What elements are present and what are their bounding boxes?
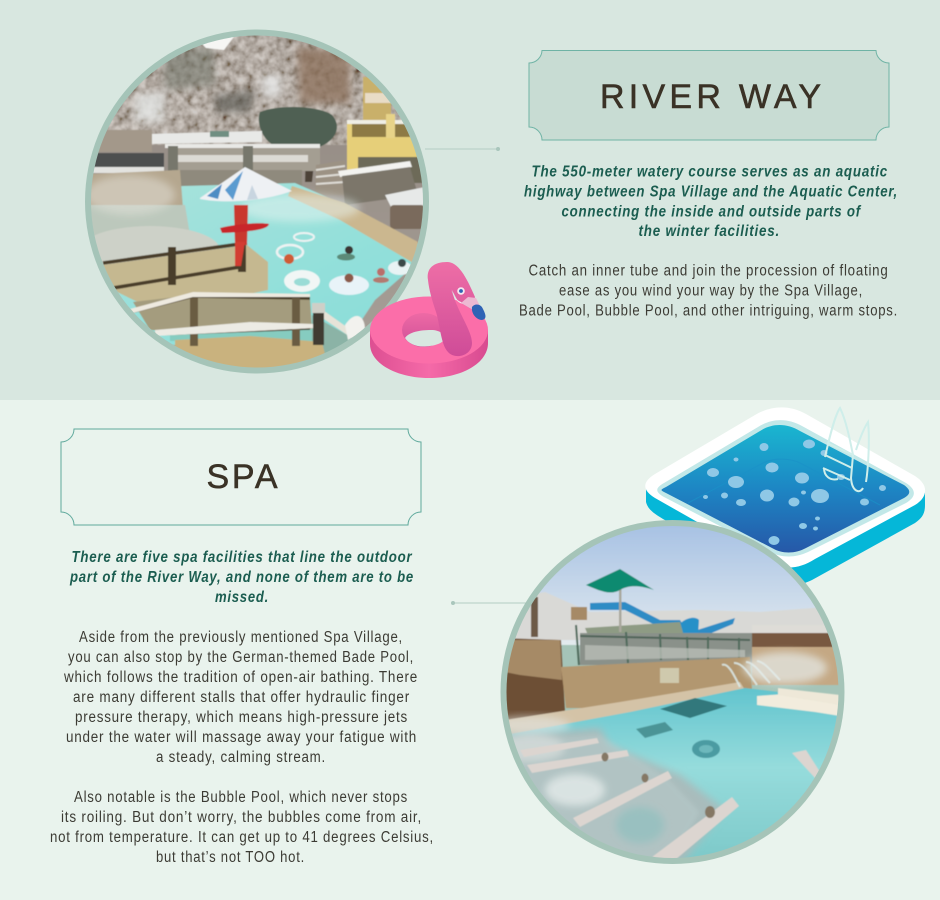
pool water [500, 688, 845, 865]
text block: spa body first paragraph: Aside from the previously mentioned Spa Village, [79, 629, 403, 646]
steam [85, 175, 175, 215]
fences [103, 243, 310, 334]
right building [752, 646, 838, 686]
text block: spa body second paragraph: its roiling. But don’t worry, the bubbles come from air, [61, 809, 422, 826]
flamingo neck and head [428, 262, 475, 356]
deck with fence [103, 245, 268, 308]
text block: spa body first paragraph: which follows the tradition of open-air bathing. There [63, 669, 418, 686]
water strip and mesh [170, 329, 320, 341]
foamy massage area [512, 725, 720, 858]
wall left [90, 170, 183, 208]
icon: pink flamingo pool float [370, 262, 488, 378]
panel: river way background [0, 0, 940, 400]
balustrade [170, 147, 320, 171]
title: river way: RIVER WAY [600, 78, 821, 116]
icon: swimming pool with ladder [645, 407, 925, 585]
water [85, 183, 420, 345]
panel: spa background [0, 400, 940, 900]
stone wall [561, 657, 752, 708]
text block: spa body first paragraph: under the water will massage away your fatigue with [66, 729, 417, 746]
text block: spa body second paragraph: Also notable is the Bubble Pool, which never stops [74, 789, 408, 806]
connector: river way photo to text [425, 147, 500, 151]
yellow building [346, 124, 417, 170]
connector: spa text to photo [451, 601, 530, 605]
lamp post [313, 303, 324, 345]
text block: river way body: ease as you wind your way by the Spa Village, [559, 282, 863, 300]
evergreen tree [259, 107, 337, 148]
text block: spa body first paragraph: you can also stop by the German-themed Bade Pool, [68, 649, 414, 666]
bottom deck [174, 336, 325, 368]
text block: river way intro: connecting the inside and outside parts of [562, 204, 862, 220]
text block: spa intro: part of the River Way, and none of them are to be [69, 569, 414, 586]
green umbrella [619, 570, 622, 632]
text block: spa body first paragraph: a steady, calming stream. [156, 749, 326, 766]
photo: spa outdoor pool with water jets [490, 520, 845, 865]
snowy hillside texture [108, 36, 402, 146]
steamy round pool [94, 226, 218, 265]
text block: river way intro: The 550-meter watery course serves as an aquatic [532, 164, 888, 180]
left stone and rock wall [506, 638, 566, 720]
pool bubbles [703, 440, 886, 545]
pool ladder [823, 408, 869, 491]
water jets and pool steps [722, 661, 780, 687]
text block: spa body second paragraph: not from temperature. It can get up to 41 degrees Celsius, [50, 829, 434, 846]
photo: river way lazy river in snow [80, 30, 430, 375]
right curved wall [288, 186, 418, 264]
distant snowy trees [505, 592, 840, 640]
text block: spa body first paragraph: are many different stalls that offer hydraulic finger [73, 689, 410, 706]
title: spa: SPA [206, 458, 278, 496]
heading banner: spa [61, 429, 421, 525]
jet benches [520, 738, 820, 860]
text block: spa intro: missed. [215, 589, 269, 606]
text block: river way intro: the winter facilities. [638, 223, 780, 240]
stairs and shed [316, 164, 320, 168]
dark pool floor patches [660, 698, 727, 718]
fence [580, 633, 752, 665]
text block: spa body second paragraph: but that’s not TOO hot. [156, 849, 305, 866]
text block: spa body first paragraph: pressure therapy, which means high-pressure jets [75, 709, 408, 726]
heading banner: river way [529, 50, 889, 140]
swimmers and rings [277, 233, 412, 295]
text block: spa intro: There are five spa facilities that line the outdoor [72, 549, 413, 566]
pool deck edge [505, 682, 745, 735]
water slides [590, 602, 736, 634]
distant roofs [147, 131, 262, 144]
text block: river way body: Catch an inner tube and join the procession of floating [528, 262, 888, 280]
lifeguard and umbrella [238, 205, 242, 260]
